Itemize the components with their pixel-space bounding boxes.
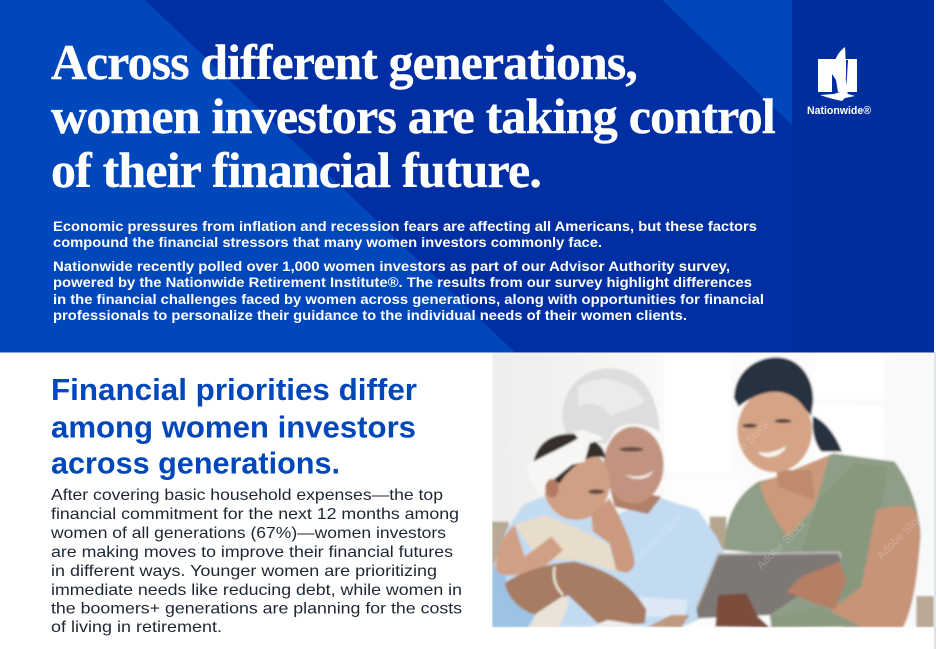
intro text: in the financial challenges faced by women across generations, along with opportunities for financial (53, 292, 764, 307)
watermark: Adobe Stock (868, 398, 922, 452)
body paragraph: of living in retirement. (51, 619, 222, 636)
intro text: Nationwide recently polled over 1,000 women investors as part of our Advisor Authority survey, (53, 259, 730, 274)
intro text: powered by the Nationwide Retirement Institute®. The results from our survey highlight differences (53, 275, 752, 290)
tablet (696, 552, 841, 618)
body paragraph: After covering basic household expenses—the top (51, 487, 443, 504)
photo: grandmother, baby and mother with a tablet (492, 353, 934, 627)
intro text: compound the financial stressors that many women investors commonly face. (53, 235, 602, 250)
section heading: among women investors (51, 410, 416, 444)
watermark (635, 420, 920, 570)
watermark: Adobe Stock (658, 368, 712, 422)
title: Across different generations, (51, 34, 637, 90)
watermark: Adobe Stock (875, 508, 929, 562)
body paragraph: in different ways. Younger women are prioritizing (51, 563, 437, 580)
body paragraph: the boomers+ generations are planning for the costs (51, 600, 462, 618)
intro text: professionals to personalize their guidance to the individual needs of their women clients. (53, 308, 687, 323)
watermark: Adobe Stock (718, 418, 772, 472)
body paragraph: are making moves to improve their financial futures (51, 544, 453, 561)
icon: eagle and N mark (818, 47, 857, 101)
body paragraph (50, 487, 462, 636)
title: of their financial future. (51, 142, 541, 198)
wordmark: Nationwide® (807, 105, 871, 117)
header banner (0, 0, 934, 352)
title (51, 34, 776, 198)
body paragraph: financial commitment for the next 12 months among (51, 506, 459, 523)
watermark: Adobe Stock (632, 511, 686, 565)
title: women investors are taking control (51, 88, 776, 144)
grandmother arm and hand (505, 562, 646, 627)
section heading (51, 372, 417, 480)
logo: Nationwide (807, 47, 871, 117)
watermark: Adobe Stock (492, 413, 546, 467)
body paragraph: women of all generations (67%)—women investors (50, 525, 446, 542)
section heading: across generations. (51, 446, 340, 480)
section heading: Financial priorities differ (51, 372, 417, 407)
grandmother (492, 497, 726, 627)
page edge line (934, 352, 936, 649)
watermark: Adobe Stock (755, 518, 809, 572)
baby (543, 447, 610, 520)
body paragraph: immediate needs like reducing debt, while women in (51, 582, 462, 599)
mother (725, 453, 921, 627)
intro text: Economic pressures from inflation and recession fears are affecting all Americans, but these factors (53, 219, 757, 234)
intro text (53, 219, 764, 323)
